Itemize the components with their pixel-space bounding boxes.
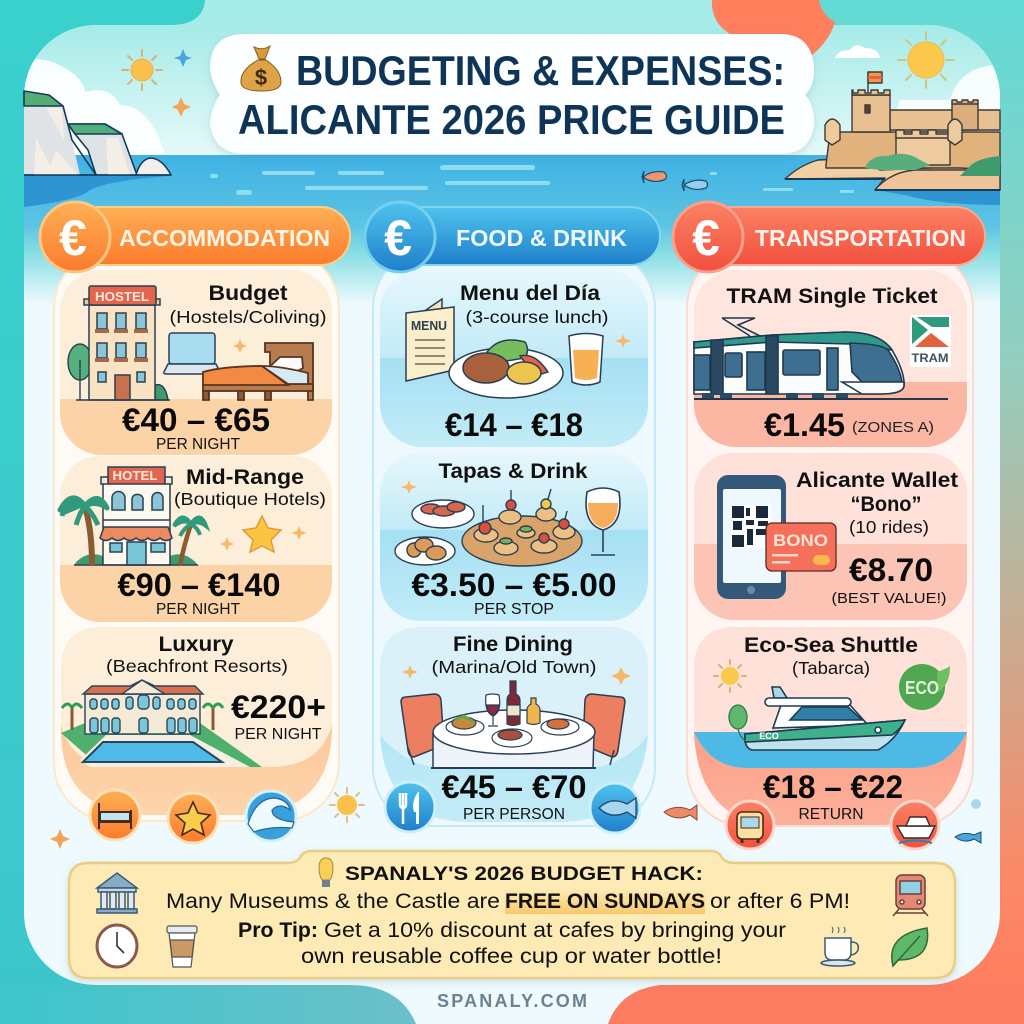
icon: sparkle orange (172, 97, 191, 117)
transport header (673, 202, 985, 272)
icon: plate of food (449, 340, 563, 398)
unit: fine dining: PER PERSON (463, 806, 565, 823)
icon: hostel (76, 286, 170, 400)
icon: hostel: HOSTEL (95, 289, 149, 304)
icon: palm left (60, 498, 107, 565)
icon: resort (61, 680, 262, 767)
panel: food and drink (365, 202, 660, 826)
price: mid-range: €90 – €140 (118, 567, 280, 603)
card: menu del dia (380, 270, 648, 447)
text: pro tip line one: Get a 10% discount at cafes by bringing your (324, 918, 786, 942)
icon: wave badge (246, 791, 296, 841)
sublabel: hostels: (Hostels/Coliving) (170, 307, 326, 327)
icon: menu (406, 299, 454, 381)
icon: fish (664, 805, 697, 820)
footer site name: SPANALY.COM (437, 991, 587, 1011)
icon: tea cup (821, 927, 858, 966)
price: luxury: €220+ (231, 689, 326, 725)
card: luxury (61, 627, 332, 815)
label: tram ticket: TRAM Single Ticket (726, 285, 938, 308)
icon: clock (97, 925, 137, 967)
card: budget (60, 270, 332, 455)
icon: table setting (446, 681, 579, 747)
unit: tapas: PER STOP (474, 601, 554, 618)
icon: fish orange (642, 171, 666, 183)
accommodation header: € (59, 210, 87, 266)
icon: eco badge (899, 664, 950, 710)
card: tram (694, 270, 967, 447)
price: budget: €40 – €65 (122, 402, 270, 438)
icon: cliffs (24, 91, 171, 175)
price: fine dining: €45 – €70 (442, 769, 586, 805)
accommodation header (40, 202, 350, 272)
icon: bed badge (90, 790, 140, 840)
price: eco: €18 – €22 (763, 769, 903, 805)
food header: € (384, 210, 412, 266)
clouds (24, 45, 1000, 155)
sparkle (615, 334, 631, 348)
icon: cutlery badge (385, 782, 435, 832)
icon: tram logo: TRAM (912, 351, 948, 365)
icon: phone (717, 475, 786, 599)
text: museums line end: or after 6 PM! (710, 889, 850, 913)
accommodation header: ACCOMMODATION (119, 225, 330, 251)
icon: fish blue (682, 179, 708, 191)
icon: tram logo (910, 315, 951, 367)
label: tapas: Tapas & Drink (438, 460, 588, 483)
label: luxury: Luxury (158, 633, 234, 656)
icon: star (243, 516, 281, 552)
unit: luxury: PER NIGHT (234, 726, 322, 743)
card: mid-range (60, 456, 332, 622)
unit: best value: (BEST VALUE!) (832, 590, 946, 607)
highlight: free on sundays (505, 890, 705, 914)
sublabel: beachfront: (Beachfront Resorts) (106, 656, 288, 676)
icon: wine glass (586, 488, 620, 555)
unit: return: RETURN (798, 806, 864, 823)
icon: sun (714, 660, 746, 692)
icon: chairs (401, 694, 625, 765)
price: tapas: €3.50 – €5.00 (412, 567, 616, 603)
price: menu: €14 – €18 (445, 407, 583, 443)
panel: accommodation (40, 202, 350, 821)
icon: small leaf (729, 705, 747, 741)
label: fine dining: Fine Dining (453, 633, 573, 656)
sublabel: boutique: (Boutique Hotels) (174, 489, 326, 509)
icon: small fish (955, 832, 981, 843)
icon: hotel: HOTEL (112, 469, 158, 483)
icon: bus badge (726, 801, 774, 849)
label: wallet: Alicante Wallet (796, 469, 958, 492)
sparkle (291, 526, 307, 540)
food header: FOOD & DRINK (456, 225, 627, 251)
icon: sea (694, 732, 967, 768)
unit: budget: PER NIGHT (156, 436, 241, 453)
icon: hotel (74, 467, 198, 565)
icon: menu: MENU (411, 318, 447, 333)
icon: eco badge: ECO (905, 678, 939, 698)
text: pro tip line two: own reusable coffee cup or water bottle! (301, 944, 722, 968)
icon: light bulb (319, 858, 333, 887)
icon: money bag (241, 46, 281, 91)
icon: fish badge (590, 783, 640, 833)
sparkle (401, 480, 417, 494)
sublabel: rides: (10 rides) (849, 517, 929, 537)
icon: right sun (898, 32, 954, 88)
label: bono: “Bono” (850, 493, 922, 516)
icon: tapas platter (395, 489, 582, 566)
text: free on sundays: FREE ON SUNDAYS (505, 889, 705, 913)
title line two: ALICANTE 2026 PRICE GUIDE (238, 96, 785, 143)
text: museums line start: Many Museums & the Castle are (166, 889, 500, 913)
icon: blue dot (971, 799, 981, 809)
icon: palm right (174, 517, 206, 565)
card: eco shuttle (694, 627, 967, 825)
icon: left sun (122, 50, 162, 90)
sublabel: lunch: (3-course lunch) (466, 307, 608, 327)
icon: leaf (892, 928, 928, 966)
card: wallet (694, 453, 967, 620)
unit: mid-range: PER NIGHT (156, 601, 241, 618)
panel: transportation (673, 202, 985, 826)
sublabel: tabarca: (Tabarca) (792, 658, 870, 678)
label: mid-range: Mid-Range (186, 466, 304, 489)
label: eco shuttle: Eco-Sea Shuttle (744, 634, 918, 657)
icon: castle (785, 72, 1000, 190)
icon: train (893, 875, 928, 916)
icon: coffee cup (167, 926, 197, 967)
icon: table (431, 710, 596, 768)
icon: bono card (766, 523, 836, 571)
icon: bed (203, 343, 313, 400)
sea highlights (210, 165, 854, 195)
unit: zones: (ZONES A) (852, 419, 934, 436)
icon: resort palms (62, 704, 223, 730)
icon: laptop (164, 333, 220, 374)
transport header: € (692, 210, 720, 266)
food header (365, 202, 660, 272)
sparkle (233, 339, 247, 353)
icon: bono card: BONO (773, 531, 828, 550)
price: tram: €1.45 (764, 407, 845, 443)
icon: sparkle blue (174, 49, 192, 67)
icon: mid sun (330, 788, 364, 822)
title banner (210, 34, 814, 154)
card: fine dining (380, 627, 648, 823)
sparkle (402, 665, 418, 679)
icon: boat (745, 687, 905, 750)
icon: money bag: $ (255, 65, 267, 90)
label: budget: Budget (208, 282, 288, 305)
price: wallet: €8.70 (849, 552, 933, 588)
orange corner blob (712, 0, 835, 55)
sublabel: marina: (Marina/Old Town) (432, 657, 596, 677)
icon: museum (97, 873, 137, 913)
icon: tram (694, 318, 948, 399)
sparkle (611, 667, 631, 685)
icon: boat: ECO (759, 731, 779, 741)
icon: tree (68, 344, 92, 400)
icon: ship badge (891, 801, 939, 849)
callout heading: SPANALY'S 2026 BUDGET HACK: (345, 864, 703, 885)
label: menu del dia: Menu del Día (460, 282, 600, 305)
title line one: BUDGETING & EXPENSES: (296, 47, 785, 94)
text: pro tip label: Pro Tip: (238, 918, 318, 942)
callout: budget hack (69, 851, 955, 978)
transport header: TRANSPORTATION (755, 225, 966, 251)
icon: star badge (168, 793, 218, 843)
sparkle (220, 537, 234, 551)
card: tapas (380, 453, 648, 621)
icon: sparkle (50, 829, 70, 849)
icon: juice glass (569, 334, 603, 385)
